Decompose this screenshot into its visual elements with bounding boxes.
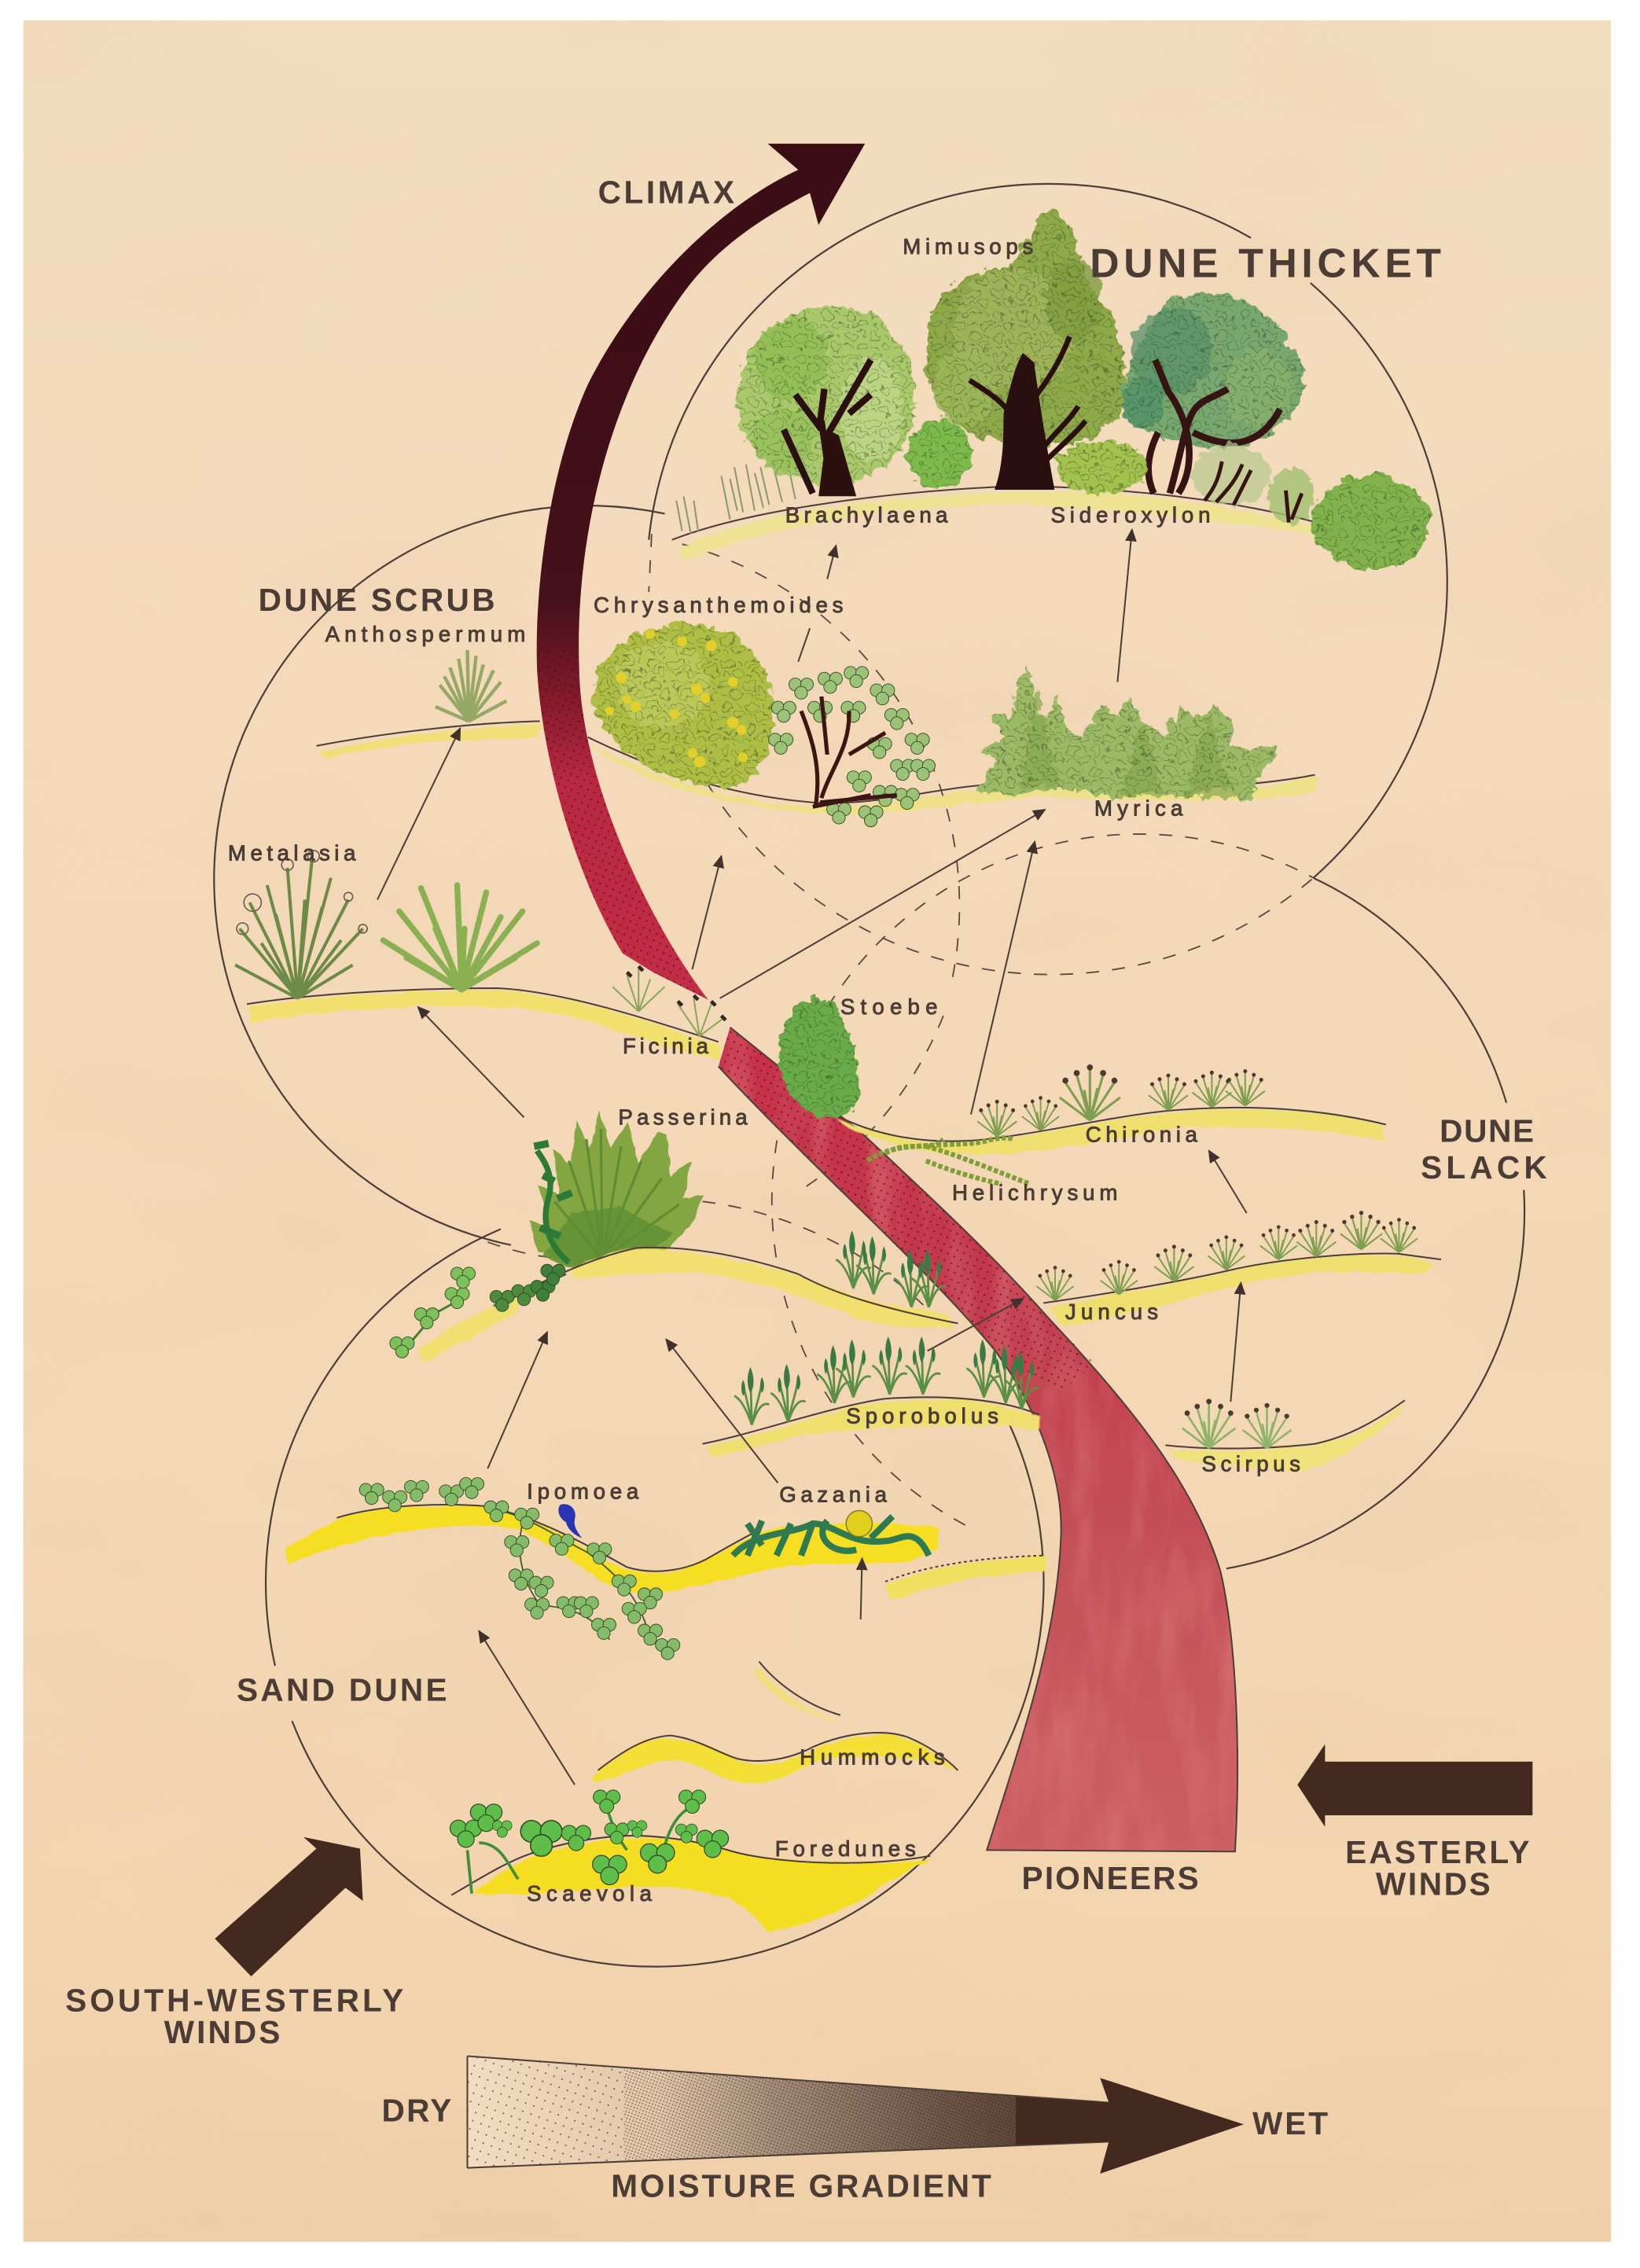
plant: Scirpus sedges xyxy=(1182,1399,1292,1448)
dune mound: Ipomoea and Gazania xyxy=(283,1505,938,1592)
plant: Chironia flowers xyxy=(977,1064,1265,1136)
label: Gazania: Gazania xyxy=(779,1482,888,1506)
heading: dune slack: SLACK xyxy=(1421,1149,1547,1185)
label: wet: WET xyxy=(1252,2105,1328,2141)
plant: Anthospermum xyxy=(436,650,506,721)
label: Ipomoea: Ipomoea xyxy=(527,1480,639,1504)
label: Ficinia: Ficinia xyxy=(623,1034,708,1058)
label: Myrica: Myrica xyxy=(1094,796,1183,820)
dune mound: Sporobolus xyxy=(702,1397,1039,1455)
moisture gradient wedge and arrow xyxy=(382,2057,1328,2204)
arrow: easterly winds xyxy=(1297,1744,1532,1902)
panel: dune scrub xyxy=(228,582,1045,1268)
icon: dark trunk and branches xyxy=(969,336,1086,489)
arrowhead xyxy=(1016,2078,1244,2174)
label: dry: DRY xyxy=(382,2093,451,2129)
plant: Ipomoea vine xyxy=(359,1478,680,1660)
plant: Metalasia xyxy=(235,851,367,998)
label: Stoebe: Stoebe xyxy=(840,994,938,1019)
plant: Gazania xyxy=(733,1510,928,1556)
label: Metalasia: Metalasia xyxy=(228,841,356,866)
ribbon upper part with arrowhead xyxy=(537,144,865,1000)
arrows inside slack xyxy=(928,842,1247,1402)
circle outlines of the four vegetation zones xyxy=(214,184,1524,1967)
plant: crest grass xyxy=(836,1230,947,1307)
dune strip: small ridge xyxy=(752,1661,840,1721)
dune mound: Scirpus xyxy=(1165,1400,1405,1470)
icon: climbing vine xyxy=(534,1143,572,1263)
icon: blue Ipomoea flower xyxy=(558,1504,582,1538)
label: Hummocks: Hummocks xyxy=(800,1745,945,1770)
heading: dune slack: DUNE xyxy=(1440,1113,1534,1149)
dune strip: lower slack xyxy=(885,1556,1045,1599)
plant: Helichrysum creeper xyxy=(868,1138,1031,1184)
dune mound: Anthospermum xyxy=(317,721,540,758)
panel: sand dune xyxy=(237,1230,1039,1932)
dune mound: Foredunes xyxy=(451,1836,930,1932)
outline: dune scrub circle xyxy=(214,505,959,1258)
arrow: south-westerly winds xyxy=(65,1837,403,2050)
heading: sand dune: SAND DUNE xyxy=(237,1671,447,1707)
label: south-westerly winds: SOUTH-WESTERLY xyxy=(65,1982,403,2018)
panel: dune slack xyxy=(774,842,1547,1599)
panel: dune thicket xyxy=(588,206,1441,827)
label: south-westerly winds xyxy=(65,1982,403,2050)
heading: pioneers: PIONEERS xyxy=(1022,1860,1199,1896)
tree: Brachylaena xyxy=(733,302,912,496)
heading: dune scrub: DUNE SCRUB xyxy=(259,582,495,618)
outline: dune thicket circle xyxy=(649,184,1447,975)
icon: yellow Gazania flower xyxy=(846,1510,872,1537)
outline: dune slack circle xyxy=(772,834,1524,1568)
shrub: clover-leafed bush xyxy=(769,667,936,827)
heading: dune slack xyxy=(1421,1113,1547,1185)
label: Chrysanthemoides: Chrysanthemoides xyxy=(594,593,844,617)
plant: sand dune creeper xyxy=(390,1264,566,1358)
label: Juncus: Juncus xyxy=(1065,1299,1158,1324)
label: Scirpus: Scirpus xyxy=(1201,1452,1300,1476)
label: easterly winds: WINDS xyxy=(1376,1866,1491,1902)
plant: Sporobolus grass xyxy=(734,1336,1039,1425)
label: Brachylaena: Brachylaena xyxy=(785,502,948,527)
tree: Sideroxylon xyxy=(1118,289,1301,494)
icon: yellow flower clusters xyxy=(605,629,748,767)
shrub: Passerina xyxy=(528,1110,702,1268)
arrows inside thicket xyxy=(798,530,1132,682)
label: Anthospermum: Anthospermum xyxy=(325,622,525,646)
label: Mimusops: Mimusops xyxy=(903,234,1033,259)
label: Foredunes: Foredunes xyxy=(775,1836,916,1861)
shrub: Myrica xyxy=(974,660,1277,801)
label: Helichrysum: Helichrysum xyxy=(952,1180,1117,1204)
ribbon lower part xyxy=(719,1027,1237,1851)
arrows inside scrub xyxy=(377,729,1045,1117)
arrows inside sand dune xyxy=(479,1332,862,1785)
shrub: Chrysanthemoides xyxy=(589,621,770,785)
label: south-westerly winds: WINDS xyxy=(164,2014,280,2050)
dune mound: Chironia xyxy=(834,1108,1386,1154)
outline: sand dune circle xyxy=(266,1201,1043,1967)
plant: Scaevola xyxy=(450,1790,729,1894)
shrub: understorey bushes xyxy=(904,417,1428,566)
dune mound: chrysanthemoides and myrica xyxy=(588,737,1318,813)
dune mound: Juncus xyxy=(1043,1254,1441,1323)
plant: Juncus rushes xyxy=(1036,1211,1418,1300)
plant: grasses xyxy=(676,465,796,534)
label: Sporobolus: Sporobolus xyxy=(846,1404,998,1428)
label: moisture gradient: MOISTURE GRADIENT xyxy=(611,2168,991,2204)
shrub: Stoebe xyxy=(774,995,856,1116)
dune mound: thicket crest xyxy=(672,486,1371,560)
label: Scaevola: Scaevola xyxy=(527,1881,652,1906)
dune mound: Metalasia and Ficinia xyxy=(247,988,719,1058)
label: easterly winds xyxy=(1345,1834,1530,1902)
label: Sideroxylon: Sideroxylon xyxy=(1050,502,1211,527)
heading: dune thicket: DUNE THICKET xyxy=(1090,241,1441,286)
tree: Mimusops xyxy=(922,206,1121,489)
heading: climax: CLIMAX xyxy=(598,174,734,210)
dune mound: Passerina crest xyxy=(417,1248,958,1361)
wedge with stipple xyxy=(467,2057,1109,2168)
label: Passerina: Passerina xyxy=(618,1105,748,1130)
label: easterly winds: EASTERLY xyxy=(1345,1834,1530,1870)
label: Chironia: Chironia xyxy=(1086,1123,1198,1147)
dune mound: Hummocks xyxy=(590,1733,958,1782)
succession ribbon: pioneers to climax xyxy=(537,144,1237,1851)
plant: Ficinia sedges xyxy=(612,966,726,1036)
plant: bright fan bush xyxy=(383,885,537,990)
